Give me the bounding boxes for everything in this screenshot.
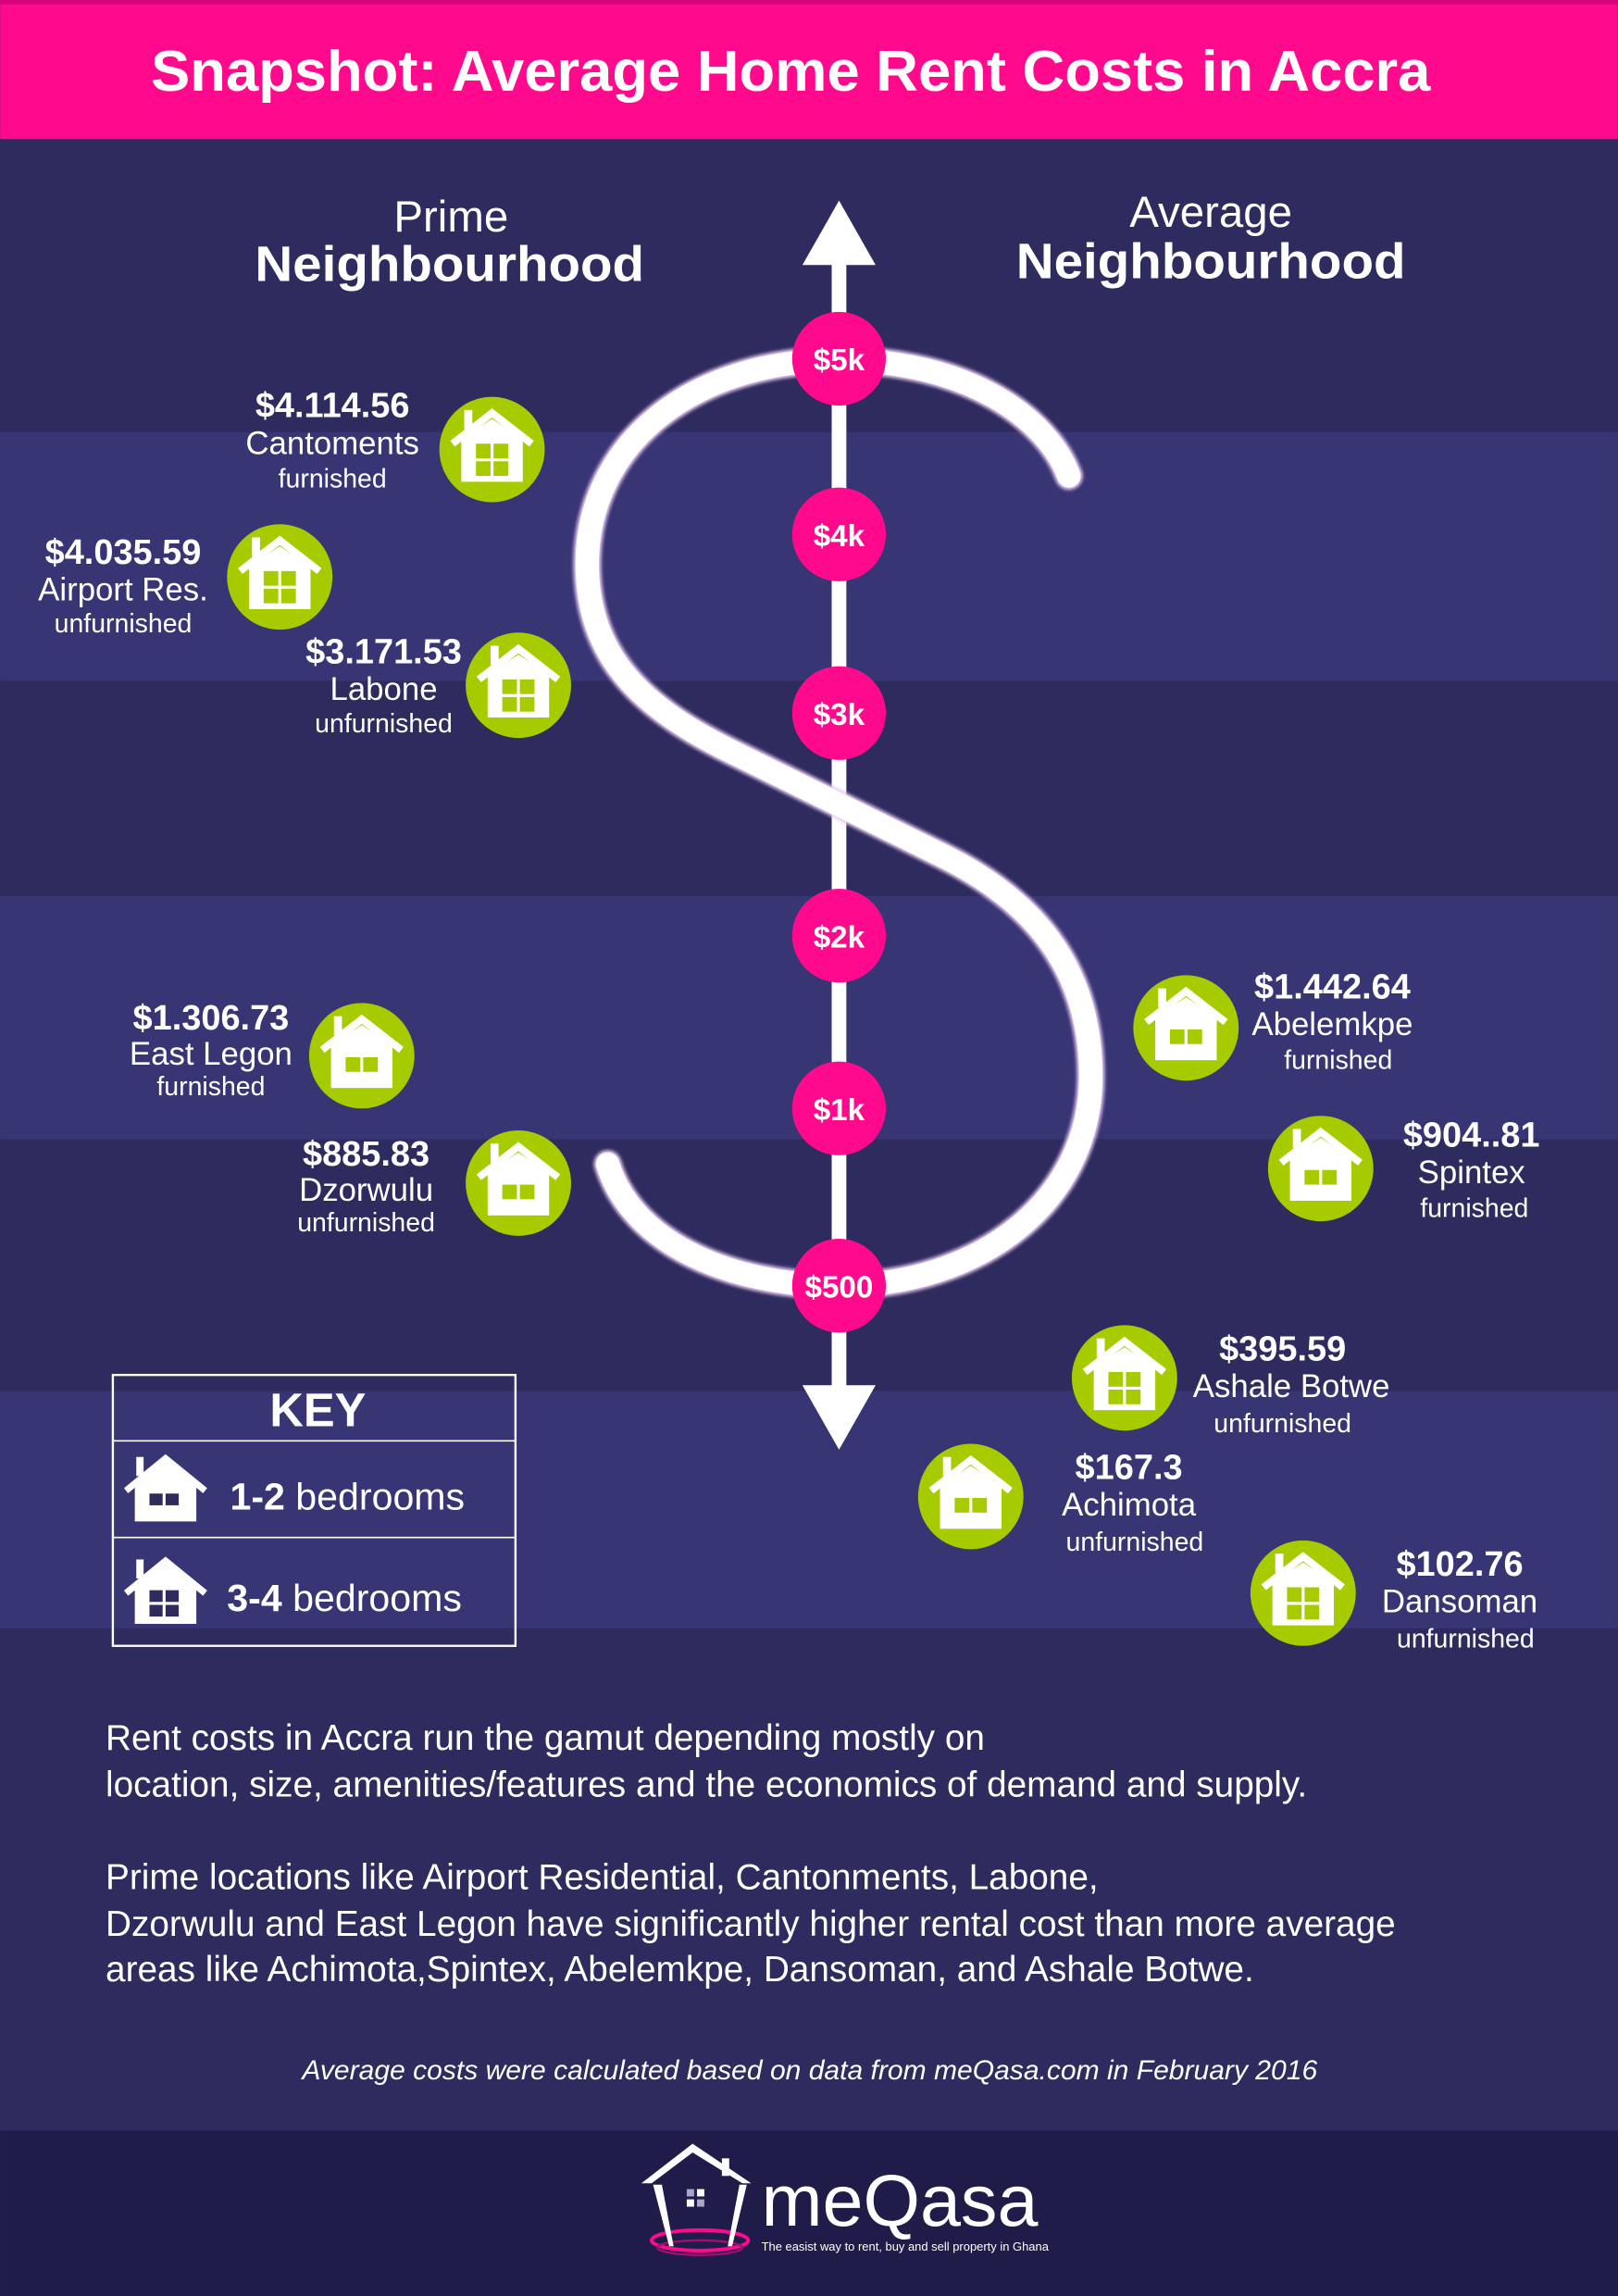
heading: prime neighbourhood: Prime (393, 193, 508, 242)
item: Cantonments: $4.114.56 (255, 387, 410, 426)
item: Spintex: furnished (1420, 1193, 1528, 1223)
scale markers: $5k (814, 343, 865, 378)
item: Dzorwulu: Dzorwulu (299, 1173, 433, 1208)
item: Achimota: unfurnished (1066, 1528, 1203, 1557)
scale markers: $4k (814, 519, 865, 554)
key row: 1-2 bedrooms: 1-2 bedrooms (230, 1476, 465, 1518)
header banner (0, 0, 1618, 139)
item: Dansoman: Dansoman (1382, 1584, 1537, 1619)
item: Ashale Botwe: unfurnished (1214, 1409, 1351, 1439)
footer (0, 2130, 1618, 2296)
item: Cantonments (245, 387, 545, 502)
item: Ashale Botwe: Ashale Botwe (1193, 1369, 1389, 1404)
logo: The easist way to rent, buy and sell property in Ghana (762, 2240, 1050, 2253)
item: East Legon (130, 999, 415, 1108)
item: Abelemkpe: Abelemkpe (1251, 1007, 1413, 1042)
item: Dansoman: $102.76 (1396, 1545, 1524, 1584)
key legend (113, 1375, 516, 1646)
dollar sign curve (587, 360, 1090, 1286)
item: Airport Res.: $4.035.59 (45, 533, 201, 572)
item: East Legon: East Legon (130, 1037, 292, 1072)
item: Labone: $3.171.53 (305, 632, 462, 671)
item: Cantonments: Cantoments (245, 426, 419, 461)
scale markers (792, 312, 886, 1332)
item: Ashale Botwe: $395.59 (1219, 1329, 1346, 1368)
item: East Legon: $1.306.73 (133, 999, 289, 1038)
text block: description: Dzorwulu and East Legon have significantly higher rental cost than more average (106, 1904, 1396, 1944)
logo: meQasa (762, 2159, 1038, 2241)
heading: average neighbourhood: Neighbourhood (1016, 234, 1406, 290)
item: Labone: Labone (330, 672, 438, 707)
item: Spintex (1268, 1116, 1540, 1223)
item: Airport Res.: Airport Res. (38, 572, 208, 607)
item: Dansoman (1251, 1541, 1537, 1653)
text block: description (106, 1718, 1396, 1990)
axis arrow (803, 201, 876, 1450)
key row: 3-4 bedrooms (126, 1559, 462, 1624)
item: Dansoman: unfurnished (1397, 1624, 1535, 1653)
text block: description: location, size, amenities/features and the economics of demand and supply. (106, 1766, 1307, 1805)
item: Achimota (918, 1443, 1203, 1557)
key legend: KEY (269, 1384, 366, 1437)
heading: prime neighbourhood: Neighbourhood (255, 237, 644, 293)
item: Abelemkpe (1133, 968, 1413, 1080)
text block: description: Rent costs in Accra run the gamut depending mostly on (106, 1718, 985, 1758)
item: Airport Res. (38, 524, 332, 639)
scale markers: $1k (814, 1093, 865, 1128)
key row: 3-4 bedrooms: 3-4 bedrooms (227, 1577, 462, 1619)
scale markers: $500 (804, 1270, 873, 1304)
scale markers: $2k (814, 920, 865, 955)
item: Abelemkpe: $1.442.64 (1254, 968, 1411, 1007)
source note: Average costs were calculated based on data from meQasa.com in February 2016 (300, 2055, 1317, 2086)
text block: description: Prime locations like Airport Residential, Cantonments, Labone, (106, 1857, 1099, 1897)
item: Spintex: Spintex (1418, 1155, 1525, 1191)
item: Spintex: $904..81 (1403, 1116, 1540, 1154)
key row: 1-2 bedrooms (126, 1457, 465, 1521)
item: Dzorwulu: unfurnished (297, 1208, 435, 1238)
item: Dzorwulu: $885.83 (303, 1135, 429, 1174)
item: Labone (305, 632, 571, 739)
item: Cantonments: furnished (279, 465, 387, 494)
title: Snapshot: Average Home Rent Costs in Accra (151, 40, 1431, 104)
item: Dzorwulu (297, 1130, 571, 1238)
item: Airport Res.: unfurnished (55, 609, 192, 639)
item: Achimota: $167.3 (1076, 1448, 1183, 1487)
text block: description: areas like Achimota,Spintex, Abelemkpe, Dansoman, and Ashale Botwe. (106, 1950, 1254, 1990)
heading: prime neighbourhood (255, 193, 644, 293)
heading: average neighbourhood (1016, 188, 1406, 290)
item: Labone: unfurnished (315, 709, 453, 739)
heading: average neighbourhood: Average (1129, 188, 1292, 237)
logo (641, 2144, 1050, 2255)
item: East Legon: furnished (156, 1072, 265, 1102)
item: Achimota: Achimota (1062, 1488, 1197, 1523)
item: Ashale Botwe (1072, 1325, 1389, 1439)
item: Abelemkpe: furnished (1284, 1046, 1392, 1076)
scale markers: $3k (814, 698, 865, 732)
